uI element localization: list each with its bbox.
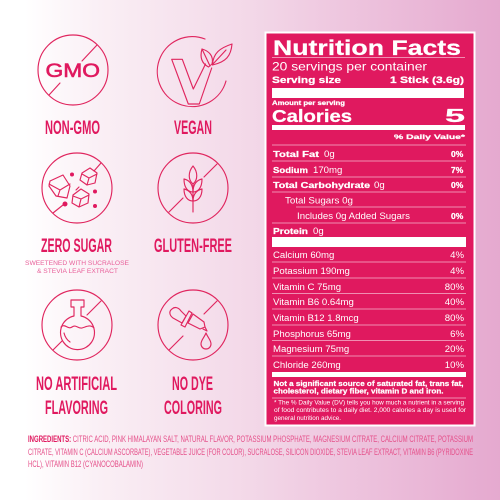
icon: no dye coloring bbox=[158, 290, 228, 360]
row: chloride: Chloride 260mg bbox=[273, 360, 341, 371]
row: phosphorus bbox=[273, 329, 464, 340]
label: non-GMO: NON-GMO bbox=[45, 117, 100, 139]
serving size: Serving size bbox=[272, 75, 341, 85]
row: vitamin C: 80% bbox=[445, 282, 464, 293]
row: total fat: 0% bbox=[451, 149, 464, 159]
row: vitamin B12 bbox=[273, 313, 464, 324]
serving size bbox=[272, 75, 464, 85]
row: chloride bbox=[273, 360, 464, 371]
panel: nutrition facts bbox=[266, 32, 474, 426]
row: total fat bbox=[273, 149, 464, 160]
footnote: daily value bbox=[274, 400, 466, 422]
row: magnesium: Magnesium 75mg bbox=[273, 344, 349, 355]
row: potassium: Potassium 190mg bbox=[273, 266, 350, 277]
row: vitamin B6 bbox=[273, 297, 464, 308]
row: total carbohydrate: 0g bbox=[374, 180, 385, 191]
row: calcium bbox=[273, 250, 464, 261]
note: sweetener: & STEVIA LEAF EXTRACT bbox=[37, 269, 118, 275]
row: vitamin C bbox=[273, 282, 464, 293]
label: flavoring: FLAVORING bbox=[45, 397, 108, 419]
row: phosphorus: Phosphorus 65mg bbox=[273, 329, 351, 340]
row: added sugars: Includes 0g Added Sugars bbox=[297, 211, 410, 222]
row: protein: Protein bbox=[273, 226, 308, 236]
footnote: daily value: * The % Daily Value (DV) tells you how much a nutrient in a serving bbox=[274, 400, 465, 406]
note: not a significant source bbox=[274, 379, 464, 396]
row: vitamin B12: 80% bbox=[445, 313, 464, 324]
label: vegan: VEGAN bbox=[174, 117, 212, 139]
row: total sugars: Total Sugars 0g bbox=[285, 196, 353, 206]
row: sodium bbox=[273, 165, 464, 176]
serving size: 1 Stick (3.6g) bbox=[390, 75, 464, 85]
amount per serving: Amount per serving bbox=[272, 101, 345, 107]
row: total carbohydrate bbox=[273, 180, 464, 191]
note: not a significant source: cholesterol, dietary fiber, vitamin D and iron. bbox=[274, 386, 444, 396]
label: coloring: COLORING bbox=[164, 397, 222, 419]
icon: no GMO bbox=[38, 35, 108, 105]
row: magnesium bbox=[273, 344, 464, 355]
calories: 5 bbox=[445, 106, 465, 126]
row: magnesium: 20% bbox=[445, 344, 464, 355]
row: protein: 0g bbox=[313, 226, 324, 237]
row: total fat: Total Fat bbox=[273, 149, 319, 159]
icon: no artificial flavoring bbox=[42, 290, 112, 360]
servings: 20 servings per container bbox=[272, 60, 427, 74]
row: chloride: 10% bbox=[445, 360, 464, 371]
ingredients: HCL), VITAMIN B12 (CYANOCOBALAMIN) bbox=[28, 458, 143, 469]
label: no dye: NO DYE bbox=[172, 373, 213, 395]
row: protein bbox=[273, 226, 324, 237]
row: sodium: 7% bbox=[451, 165, 464, 175]
row: vitamin B12: Vitamin B12 1.8mcg bbox=[273, 313, 359, 324]
icon: no GMO: GMO bbox=[46, 60, 100, 82]
row: vitamin B6: 40% bbox=[445, 297, 464, 308]
daily value header: % Daily Value* bbox=[394, 134, 466, 141]
row: potassium bbox=[273, 266, 464, 277]
calories bbox=[272, 106, 465, 126]
row: calcium: 4% bbox=[450, 250, 464, 261]
footnote: daily value: of food contributes to a daily diet. 2,000 calories a day is used for bbox=[274, 407, 466, 414]
icon: vegan bbox=[157, 37, 232, 107]
row: total carbohydrate: Total Carbohydrate bbox=[273, 180, 370, 190]
row: added sugars: 0% bbox=[451, 211, 464, 221]
row: sodium: Sodium bbox=[273, 165, 308, 175]
row: sodium: 170mg bbox=[313, 165, 342, 176]
row: potassium: 4% bbox=[450, 266, 464, 277]
row: phosphorus: 6% bbox=[450, 329, 464, 340]
icon: zero sugar bbox=[42, 153, 112, 223]
row: vitamin B6: Vitamin B6 0.64mg bbox=[273, 297, 354, 308]
row: vitamin C: Vitamin C 75mg bbox=[273, 282, 341, 293]
ingredients bbox=[28, 433, 473, 469]
title: Nutrition Facts bbox=[273, 36, 461, 60]
row: added sugars bbox=[297, 211, 464, 222]
row: total carbohydrate: 0% bbox=[451, 180, 464, 190]
note: not a significant source: Not a significant source of saturated fat, trans fat, bbox=[274, 379, 464, 388]
note: sweetener bbox=[25, 261, 129, 275]
row: calcium: Calcium 60mg bbox=[273, 250, 334, 261]
icon: gluten-free bbox=[158, 153, 228, 223]
label: gluten-free: GLUTEN-FREE bbox=[154, 235, 232, 257]
label: no artificial: NO ARTIFICIAL bbox=[36, 373, 117, 395]
label: zero sugar: ZERO SUGAR bbox=[41, 235, 112, 257]
footnote: daily value: general nutrition advice. bbox=[274, 415, 341, 422]
calories: Calories bbox=[272, 106, 352, 126]
note: sweetener: SWEETENED WITH SUCRALOSE bbox=[25, 261, 129, 267]
row: total fat: 0g bbox=[324, 149, 335, 160]
